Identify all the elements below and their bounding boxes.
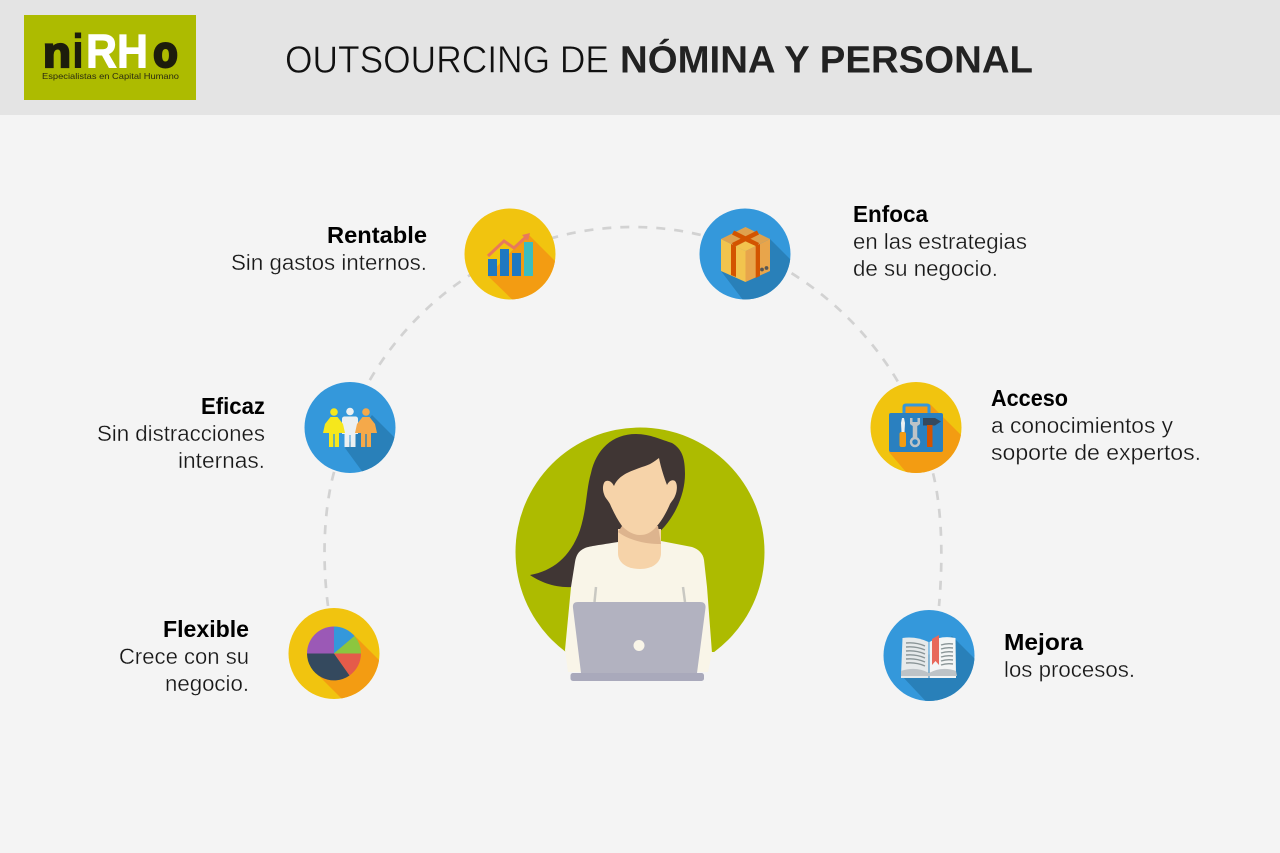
- laptop dot: [634, 640, 644, 651]
- text: Rentable: Sin gastos internos.: [231, 250, 427, 275]
- logo: niRHo: RH: [86, 24, 148, 78]
- logo: niRHo: n: [43, 29, 71, 77]
- text: Enfoca: Enfoca: [853, 201, 928, 227]
- text: Rentable: Rentable: [327, 222, 427, 248]
- header band: [0, 0, 1280, 115]
- icon: Flexible pie chart: [288, 608, 380, 699]
- text: Eficaz: Sin distracciones: [97, 421, 265, 446]
- neck: [618, 529, 661, 569]
- logo: niRHo: o: [154, 28, 178, 76]
- text: Enfoca: en las estrategias: [853, 229, 1027, 254]
- text: Acceso: [991, 385, 1201, 465]
- yellow woman: [323, 408, 345, 447]
- icon: Enfoca box: [700, 208, 790, 300]
- text: Flexible: negocio.: [165, 671, 249, 696]
- icon: Acceso toolbox: [870, 382, 962, 473]
- laptop base: [570, 673, 704, 681]
- orange woman: [355, 408, 377, 447]
- icon: Eficaz team: [304, 382, 396, 473]
- text: Flexible: Crece con su: [119, 644, 249, 669]
- title: [285, 38, 1033, 82]
- logo: niRHo: [24, 15, 196, 100]
- logo: niRHo: Especialistas en Capital Humano: [42, 71, 179, 81]
- text: Eficaz: Eficaz: [201, 393, 265, 419]
- white person: [342, 408, 358, 447]
- text: Mejora: Mejora: [1004, 629, 1083, 655]
- text: Mejora: los procesos.: [1004, 657, 1135, 682]
- green circle: [516, 428, 764, 676]
- chin shadow: [618, 526, 661, 544]
- text: Eficaz: [97, 393, 265, 473]
- central illustration: woman with laptop: [516, 428, 764, 681]
- text: Rentable: [231, 222, 427, 275]
- text: Enfoca: [853, 201, 1027, 281]
- dashed arc connecting the benefits: [325, 227, 941, 606]
- title: NÓMINA Y PERSONAL: [620, 38, 1033, 82]
- text: Flexible: Flexible: [163, 616, 249, 642]
- logo: niRHo: i: [72, 24, 84, 78]
- laptop: [573, 602, 706, 673]
- icon: Mejora open book: [884, 610, 974, 701]
- text: Acceso: a conocimientos y: [991, 413, 1174, 438]
- hair: [530, 434, 685, 587]
- icon: Rentable chart: [464, 208, 556, 300]
- text: Enfoca: de su negocio.: [853, 256, 998, 281]
- title: OUTSOURCING DE: [285, 40, 609, 82]
- text: Flexible: [119, 616, 249, 696]
- text: Acceso: Acceso: [991, 385, 1068, 411]
- face: [603, 458, 677, 535]
- text: Acceso: soporte de expertos.: [991, 440, 1201, 465]
- text: Eficaz: internas.: [178, 448, 265, 473]
- laptop straps: [594, 587, 685, 602]
- text: Mejora: [1004, 629, 1135, 682]
- body: [565, 541, 712, 672]
